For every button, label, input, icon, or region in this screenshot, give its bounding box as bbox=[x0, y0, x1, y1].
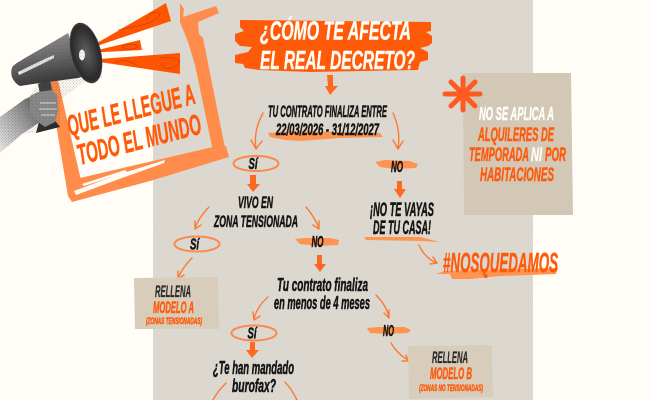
callout: no te vayas de tu casa bbox=[364, 199, 440, 242]
heading: que le llegue a todo el mundo bbox=[64, 79, 205, 172]
question: burofax: ¿Te han mandado bbox=[213, 358, 294, 378]
panel: modelo B bbox=[408, 345, 493, 399]
frame: brushed orange frame bbox=[49, 3, 229, 202]
callout: no te vayas de tu casa: ¡NO TE VAYAS bbox=[370, 199, 434, 221]
panel: exclusion note: NI bbox=[531, 144, 542, 166]
arrow: yes to zone bbox=[247, 175, 260, 192]
option: no 2: NO bbox=[312, 234, 324, 251]
panel: exclusion note: HABITACIONES bbox=[480, 164, 554, 186]
arrow: burofax right bbox=[285, 382, 297, 400]
panel: modelo B: RELLENA bbox=[432, 349, 468, 367]
panel: modelo B: (ZONAS NO TENSIONADAS) bbox=[419, 383, 483, 393]
hand bbox=[30, 90, 58, 127]
heading: que le llegue a todo el mundo: TODO EL MUNDO bbox=[74, 109, 205, 172]
arrow: to yes bbox=[251, 113, 263, 149]
option: yes 3 bbox=[232, 326, 276, 342]
arrow: to no bbox=[393, 113, 403, 149]
option: yes 1 bbox=[234, 156, 278, 173]
arrow: title to first question bbox=[325, 75, 338, 95]
arrow: no to contract length bbox=[314, 255, 326, 272]
option: yes 2 bbox=[174, 236, 220, 254]
date highlight bbox=[268, 131, 383, 141]
panel: modelo A: MODELO A bbox=[153, 299, 194, 317]
arrow: to model A bbox=[178, 258, 192, 279]
arrow: contract to no bbox=[376, 295, 389, 318]
option: no 2 bbox=[295, 234, 339, 251]
panel: exclusion note: POR bbox=[545, 144, 566, 166]
arrow: zone to yes bbox=[195, 207, 209, 229]
title: como te afecta el real decreto: EL REAL DECRETO? bbox=[260, 45, 415, 75]
panel: exclusion note: TEMPORADA bbox=[469, 144, 529, 166]
panel: paper background bbox=[153, 0, 533, 400]
callout: no te vayas de tu casa: DE TU CASA! bbox=[373, 217, 431, 239]
panel: modelo A: RELLENA bbox=[155, 283, 191, 301]
arrow: zone to no bbox=[306, 207, 319, 229]
question: contract end date bbox=[268, 102, 387, 141]
bell bbox=[64, 19, 108, 87]
horn body bbox=[11, 33, 84, 86]
panel: modelo A bbox=[134, 277, 219, 329]
option: yes 1: Sí bbox=[248, 156, 259, 173]
title: como te afecta el real decreto: ¿CÓMO TE AFECTA bbox=[260, 16, 411, 46]
arrow: no to model B bbox=[391, 343, 408, 361]
icon: asterisk bbox=[445, 78, 480, 110]
panel: modelo B: MODELO B bbox=[430, 365, 472, 383]
option: no 1: NO bbox=[391, 159, 403, 176]
question: contract length bbox=[274, 275, 370, 313]
panel: modelo A: (ZONAS TENSIONADAS) bbox=[146, 316, 202, 326]
title: como te afecta el real decreto bbox=[235, 16, 432, 75]
question: contract end date: 22/03/2026 - 31/12/2027 bbox=[275, 120, 380, 139]
arrow: burofax left bbox=[213, 383, 226, 400]
arm bbox=[0, 94, 40, 153]
arrow: yes to burofax bbox=[246, 342, 259, 358]
option: no 3: NO bbox=[383, 323, 394, 340]
handle bbox=[38, 80, 53, 94]
option: yes 3: Sí bbox=[248, 326, 258, 342]
question: contract length: en menos de 4 meses bbox=[274, 293, 370, 313]
option: no 1 bbox=[375, 159, 418, 176]
question: zona tensionada bbox=[213, 193, 298, 231]
panel: exclusion note: ALQUILERES DE bbox=[478, 124, 554, 146]
text: TU CONTRATO FINALIZA ENTRE bbox=[268, 102, 387, 121]
arrow: to hashtag bbox=[419, 245, 437, 264]
panel: exclusion note bbox=[463, 73, 573, 215]
icon: megaphone held by a hand bbox=[0, 3, 180, 153]
panel: exclusion note: NO SE APLICA A bbox=[479, 103, 554, 124]
question: zona tensionada: ZONA TENSIONADA bbox=[213, 212, 298, 231]
arrow: no to stay bbox=[394, 181, 406, 198]
question: contract length: Tu contrato finaliza bbox=[277, 275, 368, 295]
heading: que le llegue a todo el mundo: QUE LE LLEGUE A bbox=[64, 79, 199, 143]
option: yes 2: Sí bbox=[190, 236, 201, 254]
option: no 3 bbox=[367, 323, 411, 340]
hashtag bbox=[436, 247, 558, 279]
question: burofax bbox=[213, 358, 294, 396]
question: zona tensionada: VIVO EN bbox=[238, 193, 273, 212]
halftone bbox=[0, 24, 102, 153]
sound rays bbox=[85, 3, 180, 74]
question: burofax: burofax? bbox=[232, 376, 276, 396]
arrow: contract to yes bbox=[253, 297, 268, 320]
